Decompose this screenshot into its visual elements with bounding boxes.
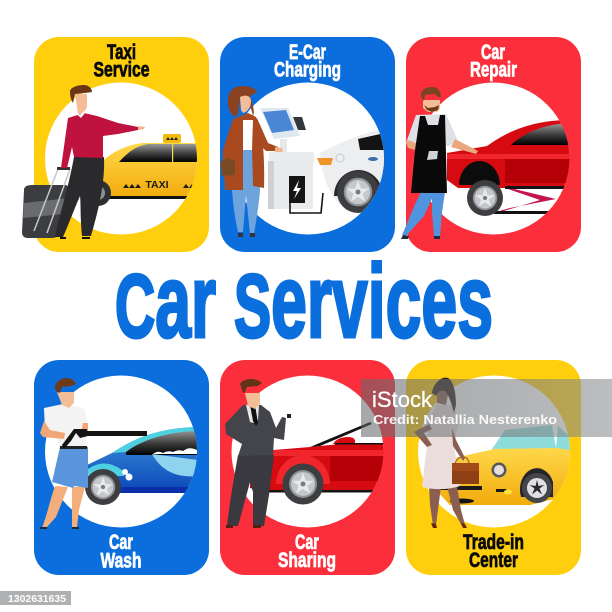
watermark banner bbox=[361, 379, 612, 437]
character: woman with briefcase bbox=[414, 378, 479, 528]
panel: car repair bbox=[401, 37, 581, 252]
heading: trade-in center: Trade-in bbox=[463, 531, 524, 554]
heading: car sharing bbox=[278, 531, 336, 572]
image id tag: 1302631635 bbox=[8, 594, 66, 605]
heading: trade-in center: Center bbox=[469, 549, 518, 572]
character: man with suitcase bbox=[22, 85, 145, 239]
illustration: yellow taxi bbox=[98, 134, 197, 206]
watermark banner: Credit: Natallia Nesterenko bbox=[373, 413, 557, 427]
heading: taxi service: Taxi bbox=[107, 41, 136, 64]
heading: car sharing: Car bbox=[295, 531, 319, 554]
heading: taxi service: Service bbox=[94, 58, 150, 82]
heading: e-car charging: E-Car bbox=[289, 41, 326, 64]
illustration: yellow car bbox=[436, 425, 570, 505]
illustration: white electric car bbox=[317, 128, 385, 213]
heading: car wash: Car bbox=[109, 531, 133, 554]
heading: e-car charging: Charging bbox=[274, 58, 341, 82]
heading: car repair bbox=[470, 41, 517, 82]
panel: taxi service bbox=[22, 37, 209, 252]
illustration: red convertible car bbox=[250, 422, 385, 504]
illustration: blue car with foam bbox=[84, 427, 198, 505]
character: woman in brown coat bbox=[220, 86, 283, 237]
heading: car repair: Repair bbox=[470, 58, 517, 82]
illustration: red car on jack bbox=[447, 120, 572, 216]
heading: car wash: Wash bbox=[100, 550, 142, 572]
illustration: charging station bbox=[260, 108, 323, 213]
panel: trade-in center bbox=[406, 360, 581, 575]
heading: car sharing: Sharing bbox=[278, 549, 336, 572]
character: mechanic in apron bbox=[401, 87, 478, 239]
heading: e-car charging bbox=[274, 41, 341, 82]
character: man with pressure washer bbox=[40, 378, 147, 529]
panel: car sharing bbox=[220, 360, 395, 575]
heading: trade-in center bbox=[463, 531, 524, 572]
heading: car repair: Car bbox=[481, 41, 505, 64]
panel: car wash bbox=[34, 360, 209, 575]
heading: car wash bbox=[100, 531, 142, 572]
illustration: yellow taxi: TAXI bbox=[145, 179, 169, 191]
heading: taxi service bbox=[94, 41, 150, 82]
watermark banner: iStock bbox=[372, 387, 433, 412]
character: man in suit with keys bbox=[225, 379, 291, 528]
panel: e-car charging bbox=[220, 37, 395, 252]
image id tag bbox=[0, 591, 71, 605]
